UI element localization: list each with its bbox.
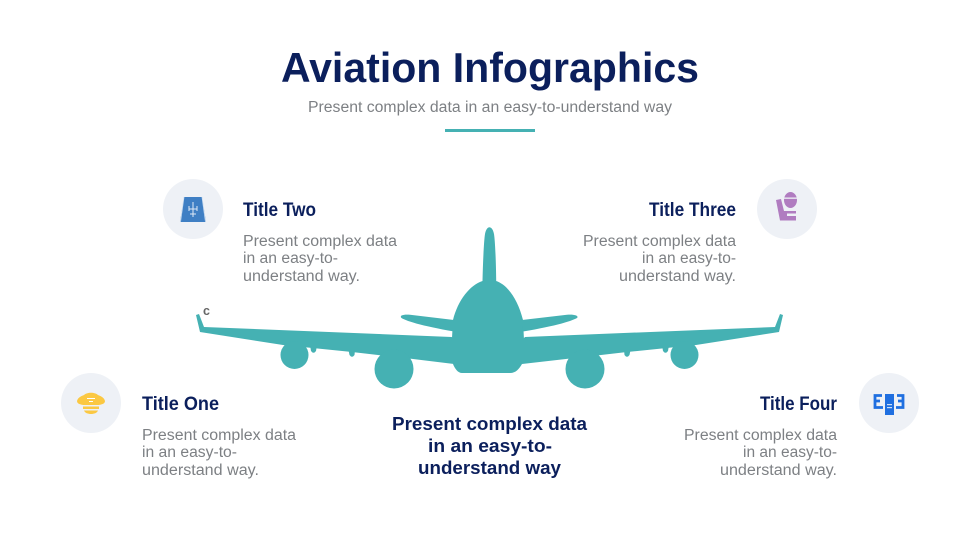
panel: title two [163, 179, 397, 285]
description: in an easy-to- [243, 250, 338, 267]
description: understand way. [720, 462, 837, 479]
description: Present complex data [142, 427, 296, 444]
icon: cockpit panel [859, 373, 919, 433]
fuselage and tail fin [452, 227, 524, 373]
right outer engine [670, 341, 698, 369]
left inner engine [374, 350, 414, 388]
left wing [196, 314, 454, 364]
description [583, 233, 736, 285]
flap fairings [310, 345, 669, 357]
panel: title three [583, 179, 817, 285]
icon: pilot cap [61, 373, 121, 433]
description: in an easy-to- [743, 444, 837, 461]
left tailplane [401, 315, 454, 332]
icon: runway [163, 179, 223, 239]
description: understand way. [142, 462, 259, 479]
right tailplane [522, 315, 578, 332]
description: understand way. [243, 268, 360, 285]
description: understand way. [619, 268, 736, 285]
description [243, 233, 397, 285]
heading: Title Two [243, 200, 316, 221]
stray letter near wing tip: c [203, 304, 210, 318]
left outer engine [280, 341, 308, 369]
title: Aviation Infographics [281, 44, 699, 91]
description: Present complex data [583, 233, 736, 250]
icon: passenger seat [757, 179, 817, 239]
description: in an easy-to- [142, 444, 237, 461]
description: in an easy-to- [642, 250, 736, 267]
right inner engine [566, 350, 604, 388]
heading: Title One [142, 394, 219, 415]
airplane silhouette [196, 227, 783, 388]
panel: title one [61, 373, 296, 479]
center callout: understand way [418, 457, 562, 478]
right wing [522, 314, 783, 364]
title accent line [445, 129, 535, 132]
subtitle: Present complex data in an easy-to-understand way [308, 99, 672, 116]
panel: title four [684, 373, 919, 479]
description [142, 427, 296, 479]
description: Present complex data [243, 233, 397, 250]
description: Present complex data [684, 427, 837, 444]
center callout [392, 413, 588, 478]
heading: Title Three [649, 200, 736, 221]
center callout: in an easy-to- [428, 435, 552, 456]
heading: Title Four [760, 394, 838, 415]
center callout: Present complex data [392, 413, 588, 434]
description [684, 427, 837, 479]
